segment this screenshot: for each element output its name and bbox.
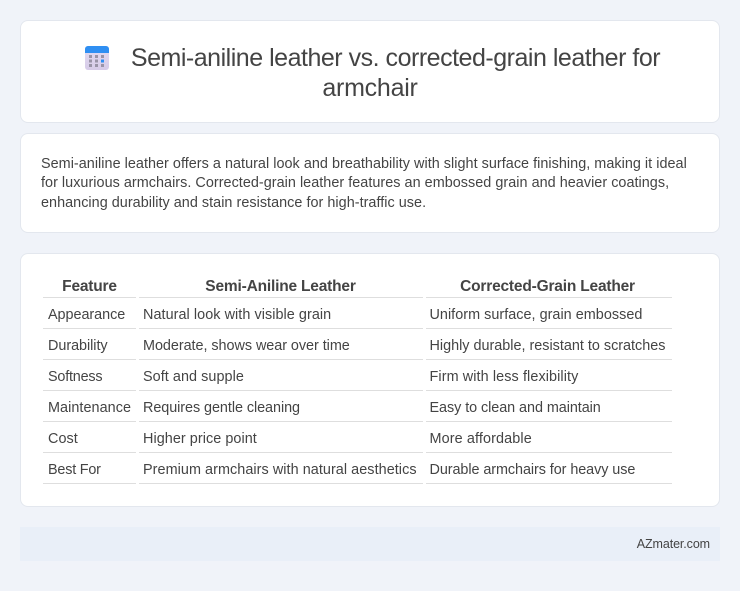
header: Feature: Feature [62,278,117,295]
row: Durability: Durability [48,338,108,354]
row: Appearance [48,307,642,323]
row: Softness [48,369,578,385]
column headers [62,278,635,295]
row: Maintenance: Requires gentle cleaning [143,400,300,416]
row: Softness: Softness [48,369,102,385]
row: Appearance: Uniform surface, grain embossed [430,307,642,323]
summary text: enhancing durability and stain resistance for high-traffic use. [41,194,426,210]
row: Maintenance: Easy to clean and maintain [430,400,601,416]
row: Cost: More affordable [430,431,532,447]
row: Softness: Firm with less flexibility [430,369,578,385]
row: Appearance: Appearance [48,307,125,323]
title: Semi-aniline leather vs. corrected-grain leather for [131,44,660,72]
row: Best For: Durable armchairs for heavy use [430,462,635,478]
footer bar [20,527,720,561]
title [131,44,660,102]
row: Maintenance: Maintenance [48,400,131,416]
row: Cost: Higher price point [143,431,257,447]
footer source text: AZmater.com [637,537,710,551]
row: Durability: Highly durable, resistant to scratches [430,338,665,354]
summary text: Semi-aniline leather offers a natural look and breathability with slight surface finishing, making it ideal [41,156,687,172]
row: Cost: Cost [48,431,78,447]
row: Durability: Moderate, shows wear over time [143,338,350,354]
summary text [41,156,687,210]
row: Maintenance [48,400,601,416]
summary text: for luxurious armchairs. Corrected-grain leather features an embossed grain and heavier coatings, [41,175,669,191]
row: Durability [48,338,665,354]
title: armchair [322,74,418,102]
row: Best For: Premium armchairs with natural aesthetics [143,462,417,478]
header: Semi-Aniline Leather: Semi-Aniline Leather [205,278,356,295]
row: Best For: Best For [48,462,101,478]
comparison table card [20,253,720,507]
title card [20,20,720,123]
row: Cost [48,431,532,447]
icon: calendar [85,46,109,70]
header: Corrected-Grain Leather: Corrected-Grain Leather [460,278,635,295]
row: Best For [48,462,635,478]
row: Appearance: Natural look with visible grain [143,307,331,323]
summary card [20,133,720,233]
row: Softness: Soft and supple [143,369,244,385]
